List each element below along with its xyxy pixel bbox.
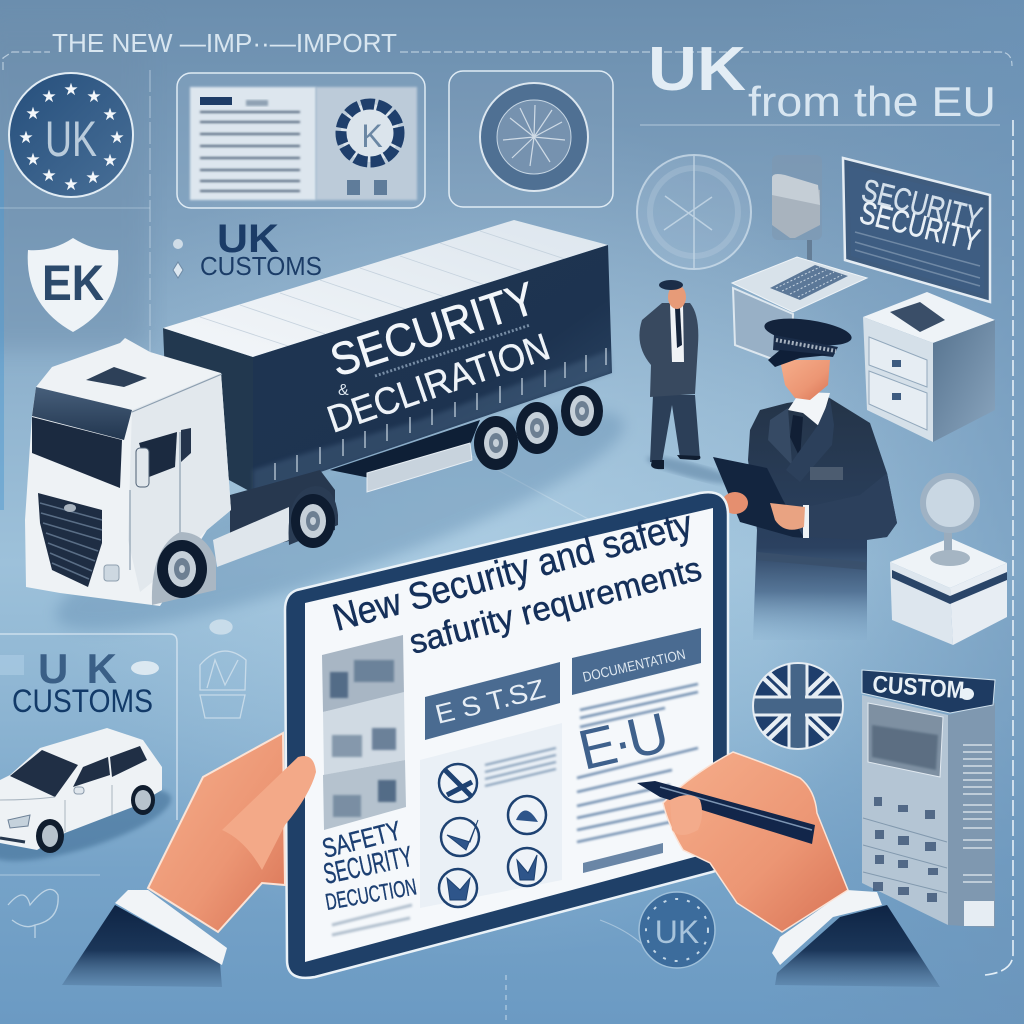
badge: UK in EU stars: ★	[63, 175, 79, 194]
label: UK customs: CUSTOMS	[200, 251, 322, 281]
UK coin: UK	[655, 914, 699, 950]
middle card	[420, 723, 562, 908]
bar: documentation	[572, 628, 701, 695]
pen	[637, 781, 815, 844]
monitor: SECURITY	[856, 194, 983, 258]
bar: documentation: DOCUMENTATION	[581, 646, 687, 685]
bar: code: E S T.SZ	[432, 674, 548, 730]
badge: UK in EU stars: ★	[25, 150, 41, 169]
face	[780, 360, 830, 400]
large officer	[713, 314, 897, 640]
front wheel	[152, 532, 216, 605]
desk with keyboard	[732, 257, 867, 366]
UK coin	[639, 892, 715, 968]
badge: UK in EU stars: ★	[41, 166, 57, 185]
title: THE NEW —IMP··—IMPORT	[52, 28, 397, 58]
thumb	[222, 756, 316, 870]
document page	[190, 87, 417, 200]
name badge	[810, 467, 843, 480]
EU text: E·U	[573, 700, 674, 782]
badge: UK in EU stars: ★	[86, 87, 102, 106]
car	[0, 728, 178, 876]
door line	[130, 374, 222, 570]
badge: UK in EU stars: ★	[41, 87, 57, 106]
heading: UK from the EU	[648, 35, 996, 125]
monitor text: SECURITY	[858, 172, 985, 236]
kiosk keypad	[873, 797, 938, 902]
windshield	[10, 750, 78, 797]
cab	[25, 338, 231, 606]
trailer: &	[338, 382, 349, 399]
shield: EK: EK	[42, 255, 104, 311]
trailer: DECLIRATION	[322, 326, 555, 442]
right sleeve	[775, 905, 940, 987]
label: UK customs	[173, 217, 322, 281]
screen	[305, 508, 713, 962]
left sleeve	[62, 905, 222, 987]
seal	[341, 104, 399, 195]
lower-left customs panel: U K	[38, 645, 117, 692]
left column labels: SAFETY	[319, 815, 404, 864]
lapels	[768, 408, 792, 465]
small officer	[639, 280, 735, 488]
shield: EK	[28, 238, 118, 332]
device: security camera	[772, 155, 822, 260]
right cuff	[772, 890, 882, 965]
clipboard	[713, 457, 804, 538]
wheels	[36, 819, 64, 853]
heading: UK from the EU: UK	[648, 35, 746, 104]
arm	[806, 473, 897, 540]
shirt and tie	[788, 392, 830, 427]
cabinet	[863, 292, 995, 442]
lower-left customs panel: CUSTOMS	[12, 683, 153, 719]
side window	[139, 432, 177, 477]
right hand	[637, 752, 940, 987]
label: UK customs: UK	[217, 217, 279, 261]
left hand	[62, 733, 316, 987]
panel: document with UK seal	[177, 73, 425, 208]
kiosk label: CUSTOM	[872, 671, 965, 704]
grille	[38, 493, 102, 587]
tablet heading: safurity requrements	[405, 550, 705, 662]
bar: code	[425, 662, 560, 740]
card lines	[485, 748, 556, 786]
icon sketches	[0, 620, 246, 938]
headlight	[104, 565, 119, 581]
left column labels	[319, 815, 418, 915]
magnifier on plinth	[890, 476, 1007, 645]
badge: UK in EU stars: ★	[25, 104, 41, 123]
safety icons	[439, 764, 546, 907]
side windows	[73, 757, 110, 787]
left column labels: SECURITY	[321, 841, 415, 891]
mirror	[136, 448, 149, 487]
document lines	[577, 684, 698, 842]
trailer text: SECURITY	[324, 272, 542, 387]
thumb	[670, 795, 702, 835]
thumbnails	[322, 635, 406, 830]
folder on cabinet	[890, 302, 945, 332]
trailer	[163, 220, 612, 495]
left cuff	[115, 890, 227, 965]
windshield	[32, 417, 122, 488]
belt	[757, 552, 866, 570]
left column labels: DECUCTION	[323, 873, 418, 915]
badge: UK in EU stars: ★	[102, 151, 118, 170]
sunroof	[86, 367, 147, 387]
customs kiosk	[862, 670, 995, 928]
heading: UK from the EU: from the EU	[748, 78, 996, 125]
panel: coin	[449, 71, 613, 207]
badge: UK in EU stars: ★	[102, 105, 118, 124]
compass emblem	[637, 155, 751, 269]
badge: UK in EU stars: ★	[109, 128, 125, 147]
kiosk screen	[868, 703, 943, 777]
chassis and rear wheel	[213, 470, 338, 567]
hands	[770, 503, 805, 530]
UK flag	[750, 660, 846, 752]
badge: UK in EU stars: UK	[45, 111, 97, 167]
badge: UK in EU stars: ★	[85, 168, 101, 187]
side skirt	[367, 443, 472, 492]
lower-left customs panel	[0, 634, 177, 820]
cap	[763, 314, 853, 367]
seal: K	[361, 118, 383, 154]
badge: UK in EU stars: ★	[18, 128, 34, 147]
coat	[748, 397, 897, 640]
tablet	[285, 492, 728, 978]
kiosk vent	[963, 745, 992, 882]
badge: UK in EU stars	[9, 73, 133, 197]
badge: UK in EU stars: ★	[63, 80, 79, 99]
tablet heading: New Security and safety	[328, 503, 697, 640]
trailer wheels	[474, 386, 603, 470]
monitor	[843, 158, 990, 302]
upper fairing	[32, 387, 132, 440]
truck	[0, 155, 1007, 987]
